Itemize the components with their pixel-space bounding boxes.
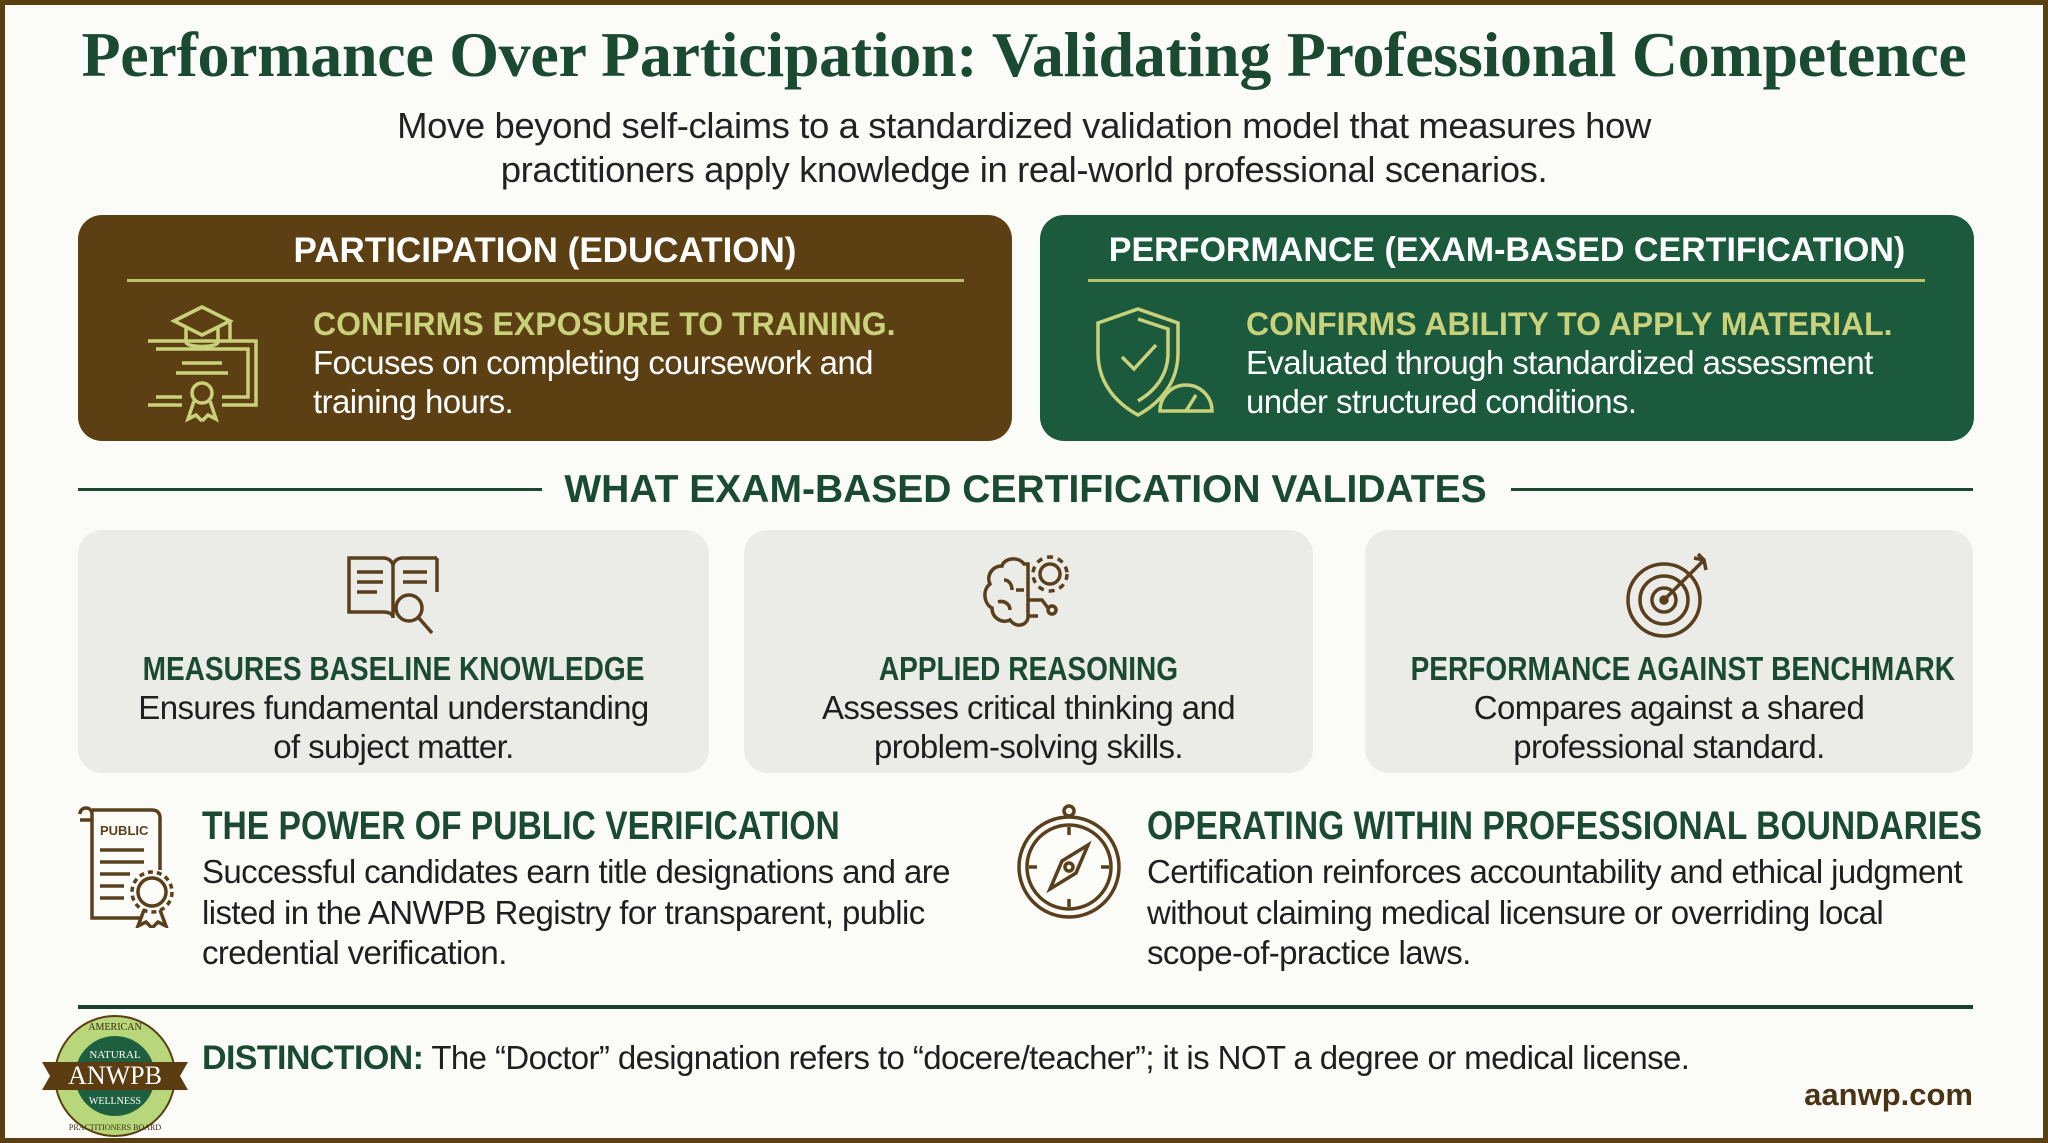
block: professional boundaries (1147, 804, 1982, 971)
panel: participation (78, 215, 1012, 441)
icon: public certificate: PUBLIC (100, 823, 149, 838)
card: baseline knowledge: of subject matter. (273, 728, 514, 765)
title: Performance Over Participation: Validating Professional Competence (81, 19, 1967, 90)
text: participation: CONFIRMS EXPOSURE TO TRAINING. (313, 306, 896, 342)
block: public verification: THE POWER OF PUBLIC VERIFICATION (202, 804, 840, 848)
subtitle (397, 105, 1652, 190)
block: professional boundaries: scope-of-practice laws. (1147, 934, 1471, 971)
distinction note: DISTINCTION: The “Doctor” designation refers to “docere/teacher”; it is NOT a degree or medical license. (202, 1039, 1689, 1077)
card: applied reasoning: APPLIED REASONING (879, 650, 1178, 687)
card: applied reasoning: Assesses critical thinking and (822, 689, 1235, 726)
card: baseline knowledge (78, 530, 709, 773)
section heading (78, 468, 1973, 511)
block: public verification (202, 804, 950, 971)
subtitle: practitioners apply knowledge in real-world professional scenarios. (501, 149, 1547, 190)
logo: ANWPB seal: ANWPB (68, 1061, 162, 1090)
icon: brain gear (983, 555, 1069, 627)
block: professional boundaries: without claiming medical licensure or overriding local (1147, 894, 1883, 930)
card: baseline knowledge: Ensures fundamental understanding (138, 689, 649, 726)
panel heading: performance: PERFORMANCE (EXAM-BASED CERTIFICATION) (1109, 231, 1905, 269)
icon: public certificate (78, 806, 174, 928)
card: applied reasoning (744, 530, 1313, 773)
text: performance: CONFIRMS ABILITY TO APPLY MATERIAL. (1246, 306, 1893, 342)
text: performance: Evaluated through standardized assessment (1246, 344, 1873, 381)
block: public verification: listed in the ANWPB Registry for transparent, public (202, 894, 925, 930)
block: professional boundaries: OPERATING WITHIN PROFESSIONAL BOUNDARIES (1147, 804, 1982, 848)
icon: diploma with cap (148, 305, 258, 422)
logo: ANWPB seal: NATURAL (89, 1049, 141, 1061)
section heading: WHAT EXAM-BASED CERTIFICATION VALIDATES (564, 468, 1487, 511)
logo: ANWPB seal (42, 1015, 188, 1137)
logo: ANWPB seal: AMERICAN (88, 1022, 142, 1033)
panel: performance (1040, 215, 1974, 441)
icon: shield with gauge (1096, 307, 1214, 417)
card: applied reasoning: problem-solving skills. (874, 728, 1183, 765)
logo: ANWPB seal: PRACTITIONERS BOARD (69, 1123, 161, 1132)
text: participation: Focuses on completing coursework and (313, 344, 873, 381)
website: aanwp.com (1804, 1077, 1973, 1112)
card: baseline knowledge: MEASURES BASELINE KNOWLEDGE (143, 650, 644, 687)
logo: ANWPB seal: WELLNESS (89, 1096, 141, 1107)
text: performance (1246, 306, 1893, 420)
block: professional boundaries: Certification reinforces accountability and ethical judgment (1147, 853, 1962, 890)
text: participation: training hours. (313, 383, 513, 420)
card: benchmark: PERFORMANCE AGAINST BENCHMARK (1411, 650, 1955, 687)
text: performance: under structured conditions. (1246, 383, 1636, 420)
subtitle: Move beyond self-claims to a standardized validation model that measures how (397, 105, 1651, 146)
panel heading: participation: PARTICIPATION (EDUCATION) (294, 231, 796, 270)
icon: book magnifier (347, 556, 439, 634)
icon: compass (1017, 804, 1121, 919)
card: benchmark: professional standard. (1513, 728, 1825, 765)
card: benchmark (1365, 530, 1973, 773)
block: public verification: credential verification. (202, 934, 507, 971)
icon: target arrow (1626, 552, 1708, 638)
card: benchmark: Compares against a shared (1474, 689, 1864, 726)
text: participation (313, 306, 896, 420)
block: public verification: Successful candidates earn title designations and are (202, 853, 950, 890)
